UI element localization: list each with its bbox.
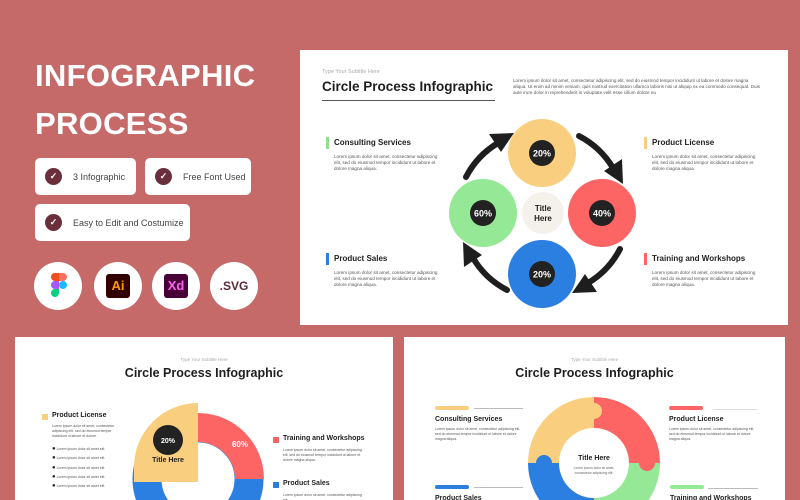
label: product sales: Product Sales	[334, 254, 387, 263]
icon: svg: .SVG	[220, 279, 248, 293]
label: product license with list: Product License	[52, 412, 106, 419]
circle: blue 20%	[508, 240, 576, 308]
label: product sales	[326, 253, 438, 287]
label: product sales: Lorem ipsum dolor sit amet, consectetur adipiscing elit, sed do eiusmod tempor incididunt ut labore et dolore magna aliqua.	[334, 270, 437, 287]
subtitle: Type Your Subtitle Here	[180, 357, 228, 362]
intro paragraph: Lorem ipsum dolor sit amet, consectetur adipiscing elit, sed do eiusmod tempor incididunt ut labore et dolore magna aliqua. Ut enim ad minim veniam, quis nostrud exercitation ullamco laboris nisi ut aliquip ex ea commodo consequat. Duis aute irure dolor in reprehenderit in voluptate velit esse cillum dolore eu	[513, 78, 760, 95]
icon: figma	[34, 262, 82, 310]
label: product license with list: ● Lorem ipsum dolor sit amet elit.	[52, 446, 105, 452]
circle: yellow 20%	[508, 119, 576, 187]
title: Circle Process Infographic	[125, 366, 283, 380]
center title: Title	[535, 204, 552, 213]
label: consulting services: Lorem ipsum dolor sit amet, consectetur adipiscing elit, sed do eiusmod tempor incididunt ut labore et dolore magna aliqua.	[334, 154, 437, 171]
circle: red 40%: 40%	[593, 208, 611, 218]
label: training and workshops: Training and Workshops	[652, 254, 745, 263]
title: Circle Process Infographic	[515, 366, 674, 380]
puzzle ring chart: Lorem ipsum dolor sit amet,	[574, 466, 614, 470]
arrows	[463, 133, 623, 293]
donut chart: 60%	[232, 440, 248, 449]
icon: xd: Xd	[168, 278, 184, 293]
badge: free font	[145, 158, 251, 195]
label: product license	[644, 137, 756, 171]
panel: donut preview	[15, 337, 393, 500]
donut chart	[132, 403, 264, 500]
icon: illustrator	[94, 262, 142, 310]
title: Circle Process Infographic	[322, 79, 493, 94]
circle: blue 20%: 20%	[533, 270, 551, 280]
subtitle: Type Your Subtitle Here	[571, 357, 618, 362]
label: product license with list: Lorem ipsum dolor sit amet, consectetur adipiscing elit, sed do eiusmod tempor incididunt ut labore et dolore.	[52, 424, 114, 438]
label: product license with list: ● Lorem ipsum dolor sit amet elit.	[52, 465, 105, 471]
headline	[35, 58, 255, 141]
badge: free font: Free Font Used	[183, 172, 246, 182]
puzzle ring chart: consectetur adipiscing elit.	[575, 471, 613, 475]
center title	[522, 192, 564, 234]
badge: easy to edit: ✓	[50, 217, 57, 227]
headline: INFOGRAPHIC	[35, 58, 255, 93]
label: consulting services	[326, 137, 438, 171]
label: training and workshops	[273, 434, 365, 462]
label: training and workshops: Lorem ipsum dolor sit amet, consectetur adipiscing elit, sed do eiusmod tempor incididunt ut labore et dolore magna aliqua.	[652, 270, 755, 287]
panel: main circle process	[300, 50, 788, 325]
label: product license: Lorem ipsum dolor sit amet, consectetur adipiscing elit, sed do eiusmod tempor incididunt ut labore et dolore magna aliqua.	[652, 154, 755, 171]
label: product license with list	[42, 412, 114, 489]
label: product license: Product License	[652, 138, 714, 147]
label: product license: Product License	[669, 416, 723, 423]
badge: 3 infographic: 3 Infographic	[73, 172, 125, 182]
panel: puzzle ring preview	[404, 337, 785, 500]
label: product license with list: ● Lorem ipsum dolor sit amet elit.	[52, 455, 105, 461]
donut chart: Title Here	[152, 457, 184, 464]
label: consulting services: Consulting Services	[435, 416, 502, 423]
donut chart: 20%	[161, 438, 176, 445]
headline: PROCESS	[35, 106, 189, 141]
label: consulting services: Lorem ipsum dolor sit amet, consectetur adipiscing elit, sed do eiusmod tempor incididunt ut labore et dolore magna aliqua.	[435, 427, 520, 441]
icon: illustrator: Ai	[112, 278, 124, 293]
badge: 3 infographic	[35, 158, 136, 195]
label: product sales	[435, 485, 523, 500]
puzzle ring chart: Title Here	[578, 455, 610, 462]
label: training and workshops	[644, 253, 756, 287]
label: training and workshops	[670, 485, 758, 500]
circle: yellow 20%: 20%	[533, 148, 551, 158]
icon: svg	[210, 262, 258, 310]
label: product sales: Product Sales	[283, 480, 330, 487]
badge: 3 infographic: ✓	[50, 171, 57, 181]
label: product license with list: ● Lorem ipsum dolor sit amet elit.	[52, 483, 105, 489]
label: consulting services	[435, 406, 523, 441]
circle: red 40%	[568, 179, 636, 247]
badge: easy to edit	[35, 204, 190, 241]
center title: Here	[534, 214, 552, 223]
label: product sales	[273, 480, 362, 500]
label: product license with list: ● Lorem ipsum dolor sit amet elit.	[52, 474, 105, 480]
subtitle: Type Your Subtitle Here	[322, 69, 380, 75]
puzzle ring chart	[528, 397, 660, 500]
label: training and workshops: Lorem ipsum dolor sit amet, consectetur adipiscing elit, sed do eiusmod tempor incididunt ut labore et dolore magna aliqua.	[283, 448, 362, 462]
badge: easy to edit: Easy to Edit and Costumize	[73, 218, 184, 228]
label: product license	[669, 406, 757, 441]
label: training and workshops: Training and Workshops	[283, 435, 365, 442]
badge: free font: ✓	[160, 171, 167, 181]
label: consulting services: Consulting Services	[334, 138, 411, 147]
icon: xd	[152, 262, 200, 310]
circle: green 60%	[449, 179, 517, 247]
label: product license: Lorem ipsum dolor sit amet, consectetur adipiscing elit, sed do eiusmod tempor incididunt ut labore et dolore magna aliqua.	[669, 427, 754, 441]
circle: green 60%: 60%	[474, 208, 492, 218]
